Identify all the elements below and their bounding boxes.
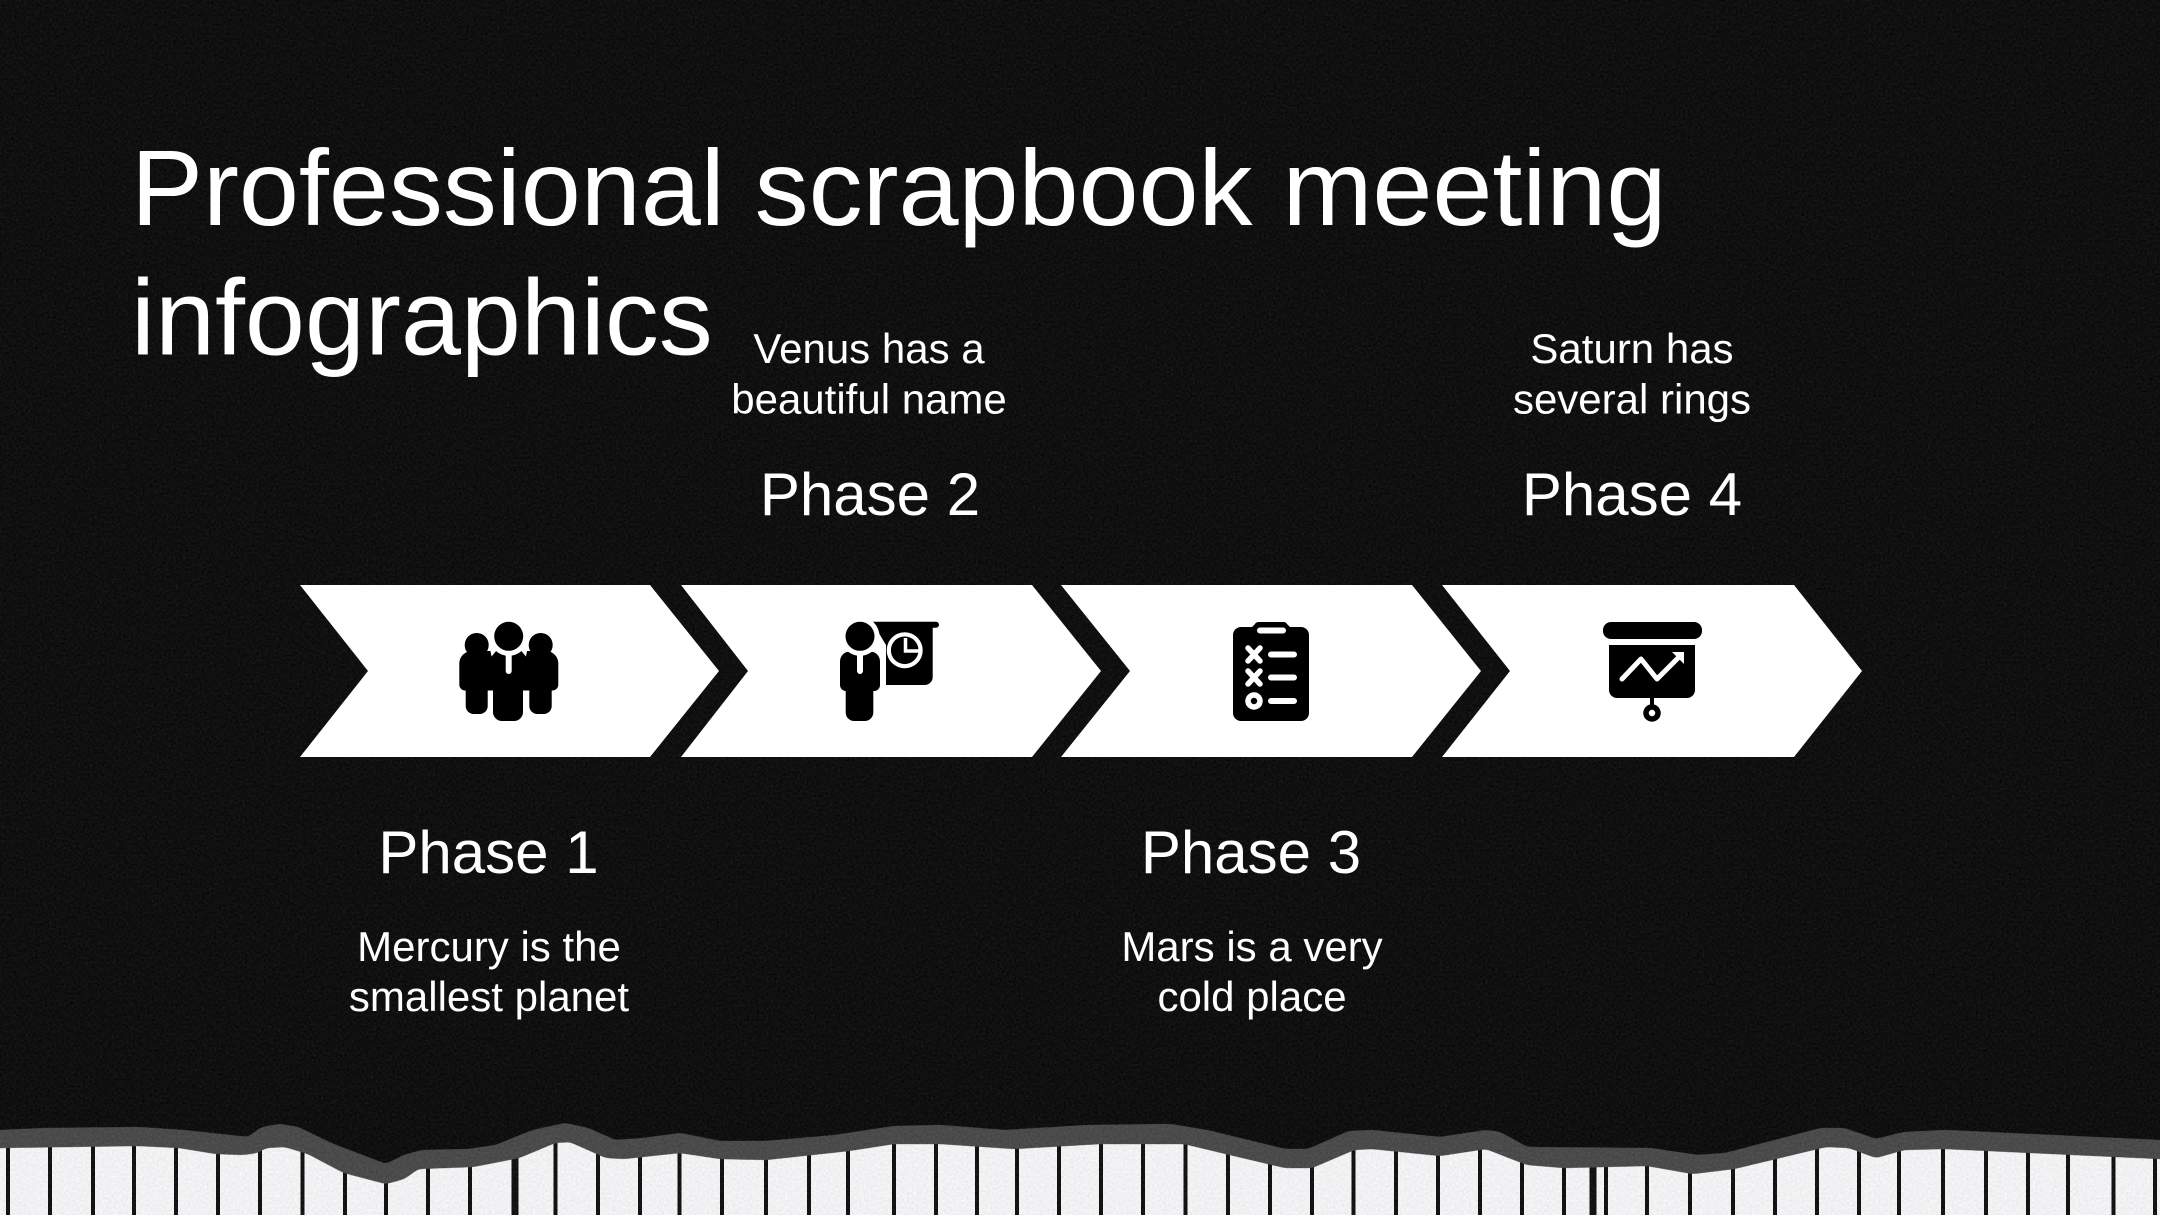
phase 1 description: smallest planet: [349, 973, 629, 1020]
title: Professional scrapbook meeting: [131, 127, 1666, 248]
phase 3 description: Mars is a very: [1121, 923, 1383, 970]
torn paper grey edge: [0, 1124, 2160, 1183]
phase 2 description: Venus has a: [753, 325, 985, 372]
phase 2 label: Phase 2: [760, 461, 980, 528]
phase 2 step: [681, 585, 1101, 757]
phase 3 description: cold place: [1157, 973, 1347, 1020]
phase 1 description: Mercury is the: [357, 923, 621, 970]
title: infographics: [131, 256, 713, 378]
chevron 3: [1061, 585, 1481, 757]
icon: team of people: [459, 617, 558, 721]
phase 3 step: [1061, 585, 1481, 757]
chevron 2: [681, 585, 1101, 757]
phase 2 description: beautiful name: [731, 376, 1007, 422]
phase 4 description: several rings: [1513, 376, 1751, 422]
phase 1 label: Phase 1: [378, 819, 599, 886]
chevron 1: [300, 585, 719, 757]
icon: clipboard checklist: [1233, 622, 1309, 721]
phase 4 step: [1442, 585, 1862, 757]
phase 3 label: Phase 3: [1141, 819, 1361, 886]
chevron 4: [1442, 585, 1862, 757]
phase 4 description: Saturn has: [1530, 325, 1734, 372]
phase 1 step: [300, 585, 719, 757]
torn paper strip: [0, 1142, 2160, 1215]
icon: presenter with pie chart board: [836, 617, 939, 721]
phase 4 label: Phase 4: [1522, 461, 1742, 528]
icon: presentation screen with rising chart: [1603, 622, 1702, 719]
